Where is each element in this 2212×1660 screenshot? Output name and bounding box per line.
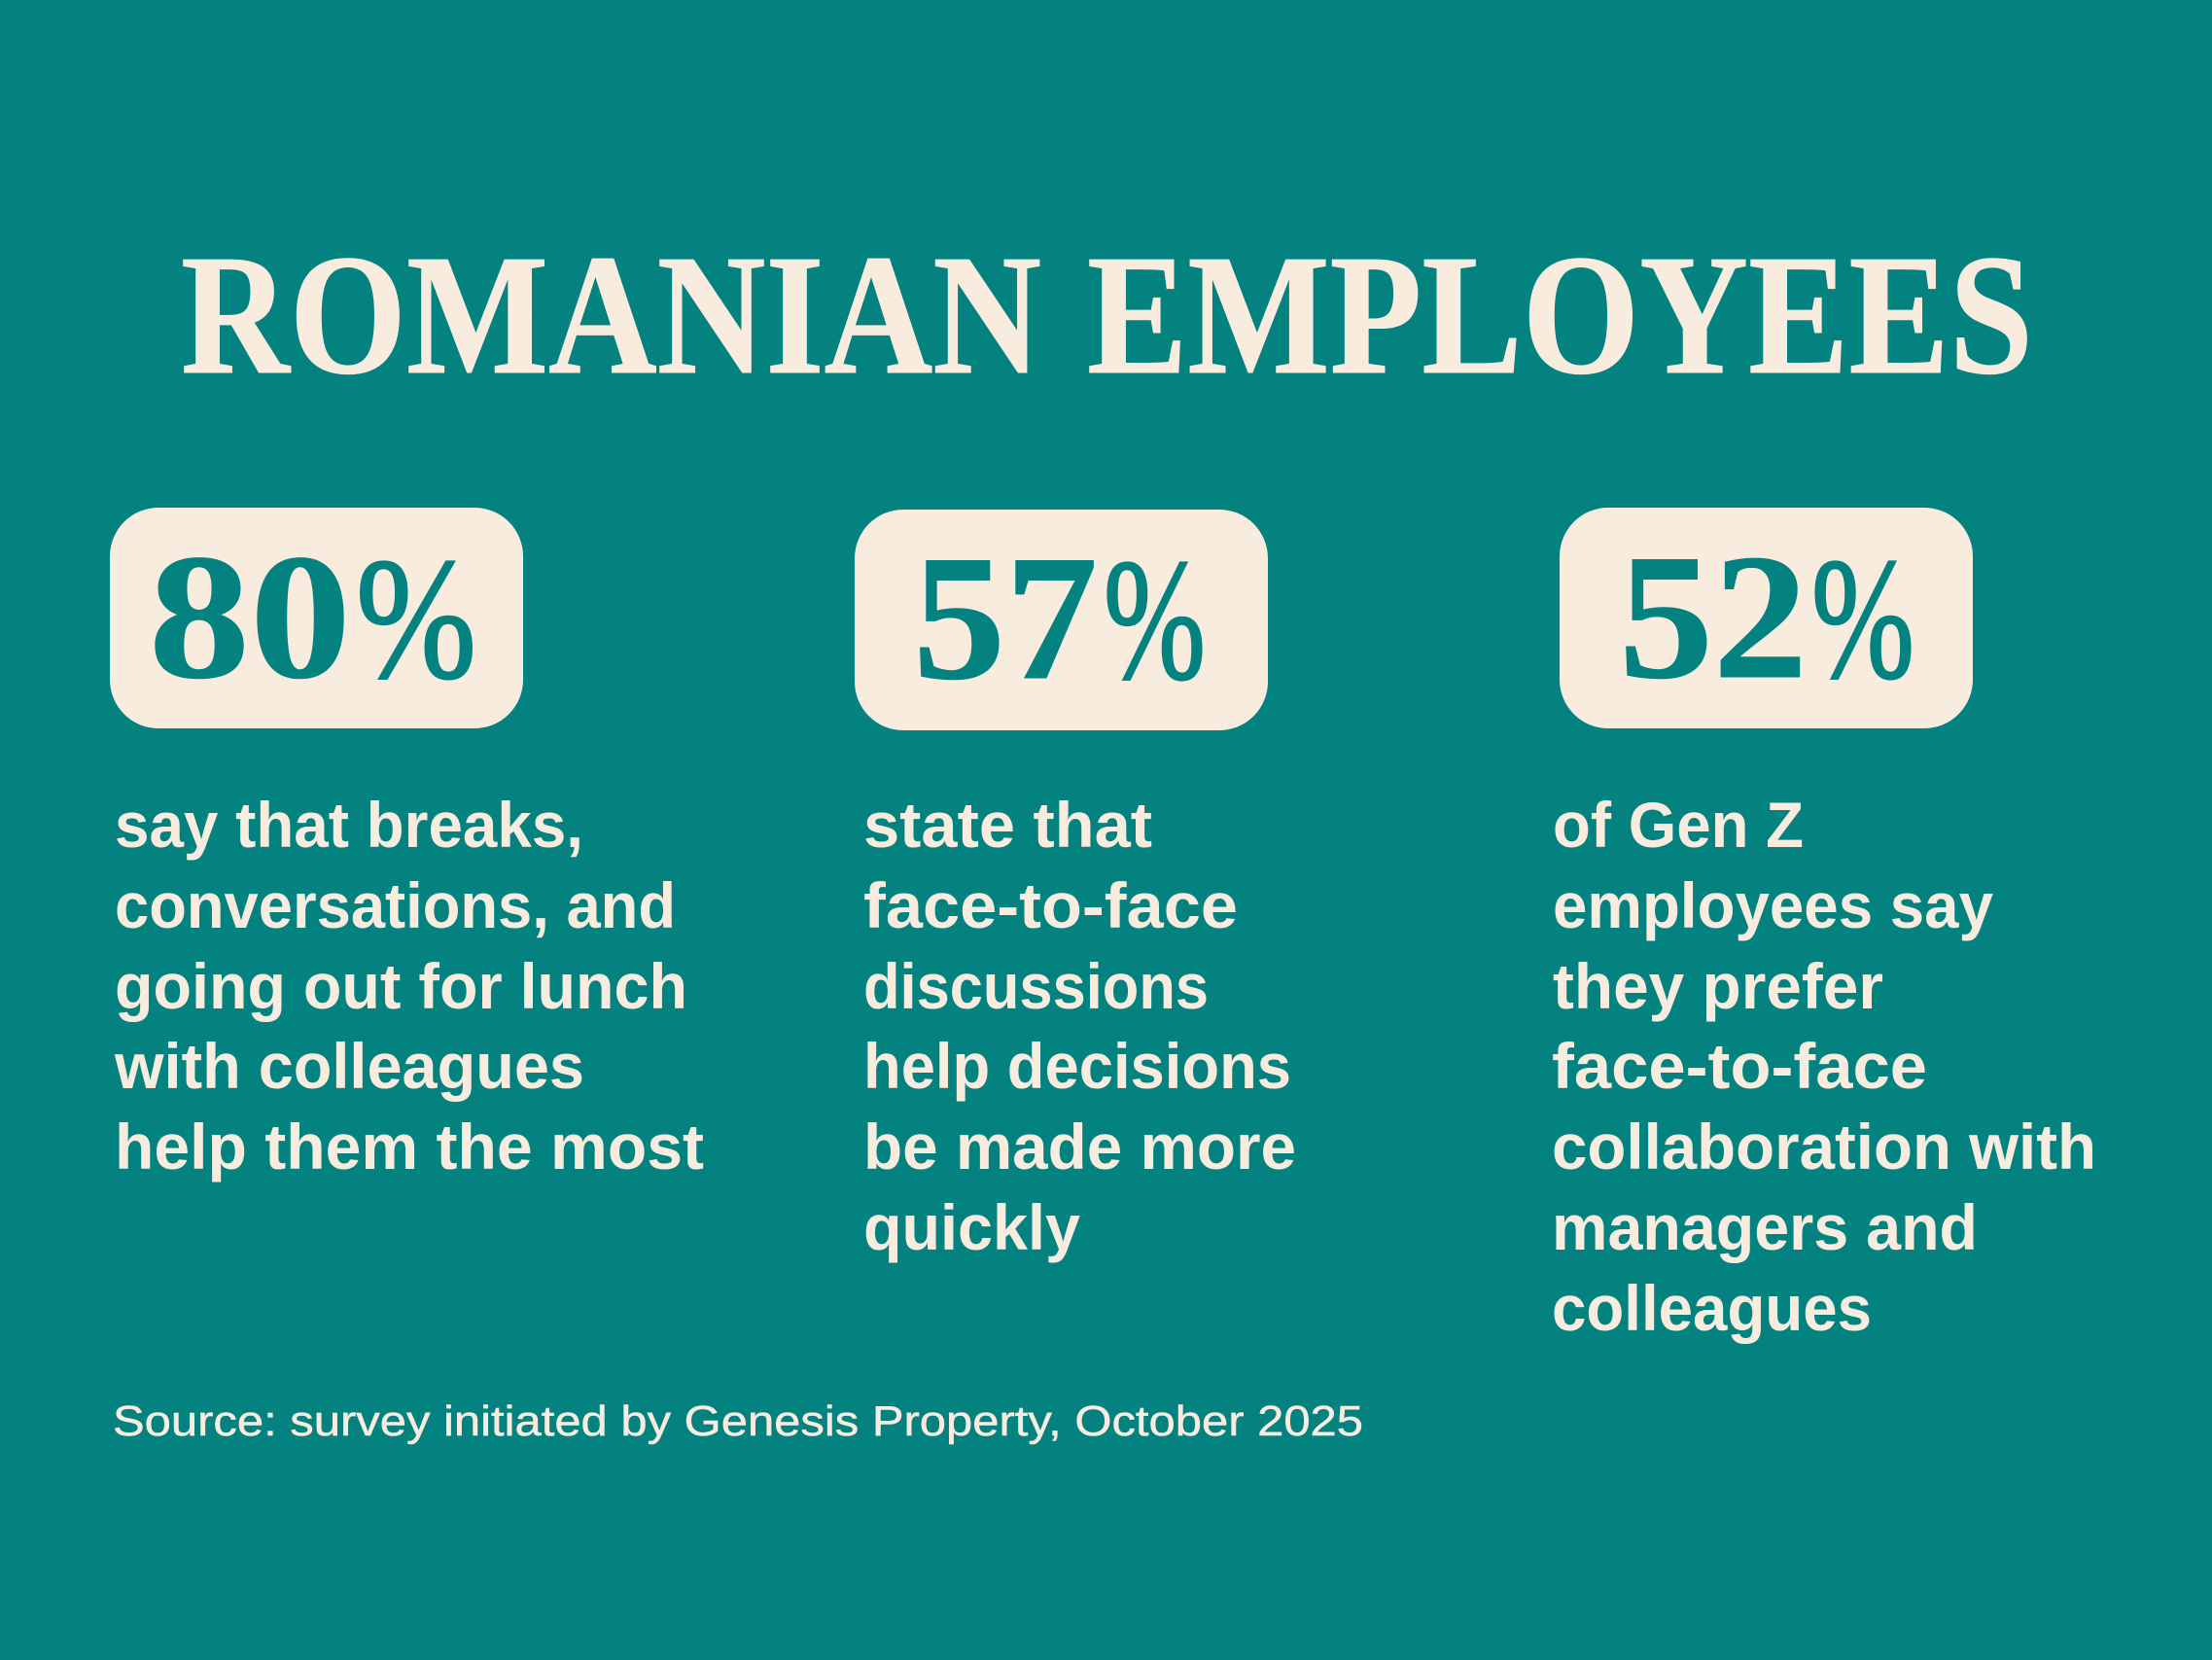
description: Gen Z preference <box>1552 789 2096 1344</box>
description: faster decisions: quickly <box>863 1191 1080 1263</box>
stat badge: 52%: 52 <box>1619 517 1808 716</box>
description: breaks and lunch: with colleagues <box>114 1030 584 1102</box>
description: faster decisions <box>863 789 1296 1263</box>
stat badge: 52%: % <box>1811 522 1914 715</box>
description: faster decisions: discussions <box>863 950 1209 1022</box>
description: Gen Z preference: of Gen Z <box>1553 789 1804 861</box>
description: breaks and lunch: say that breaks, <box>115 789 583 861</box>
stat badge: 57% <box>855 510 1268 730</box>
description: faster decisions: state that <box>863 789 1152 861</box>
description: Gen Z preference: colleagues <box>1552 1272 1872 1344</box>
title <box>181 220 2033 410</box>
stat badge: 80%: % <box>356 522 476 715</box>
stat badge: 80% <box>110 508 523 728</box>
description: Gen Z preference: face-to-face <box>1552 1030 1927 1102</box>
stat badge: 80%: 80 <box>149 517 351 716</box>
source note: Source: survey initiated by Genesis Property, October 2025 <box>113 1397 1363 1445</box>
description: faster decisions: be made more <box>863 1111 1296 1183</box>
description: Gen Z preference: managers and <box>1552 1191 1978 1263</box>
title: EMPLOYEES <box>1087 220 2033 410</box>
panel: 57% statistic <box>855 510 1296 1263</box>
stat badge: 57%: 57 <box>913 518 1098 717</box>
panel: 52% statistic <box>1552 508 2096 1344</box>
stat badge: 57%: % <box>1104 523 1206 716</box>
title: ROMANIAN <box>181 220 1041 410</box>
description: breaks and lunch: conversations, and <box>115 869 676 941</box>
panel: 80% statistic <box>110 508 704 1183</box>
description: Gen Z preference: they prefer <box>1553 950 1883 1022</box>
description: breaks and lunch <box>114 789 704 1183</box>
stat badge: 52% <box>1560 508 1973 728</box>
description: Gen Z preference: employees say <box>1553 869 1993 941</box>
description: Gen Z preference: collaboration with <box>1552 1111 2096 1183</box>
description: breaks and lunch: going out for lunch <box>115 950 687 1022</box>
description: breaks and lunch: help them the most <box>115 1111 704 1183</box>
description: faster decisions: face-to-face <box>863 869 1238 941</box>
description: faster decisions: help decisions <box>863 1030 1291 1102</box>
